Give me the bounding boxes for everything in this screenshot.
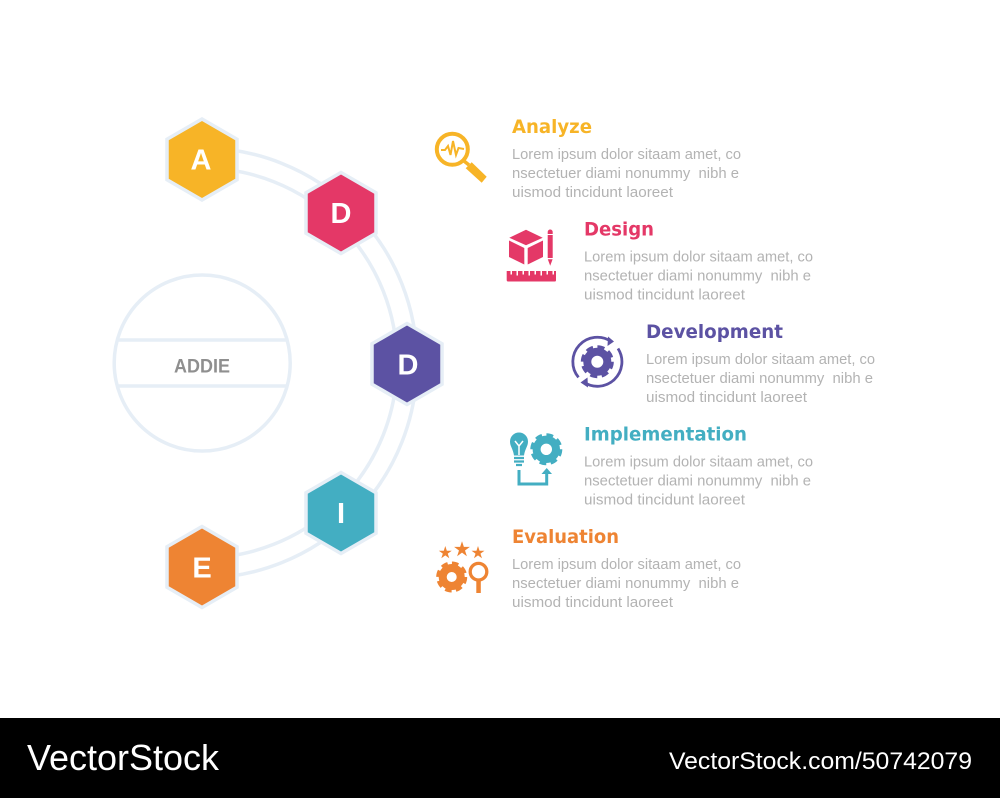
text block: Development description <box>646 352 875 406</box>
text block: Evaluation description <box>512 557 741 611</box>
text block: Implementation description: uismod tincidunt laoreet <box>584 492 745 508</box>
hexagon I <box>306 472 376 554</box>
central circle: ADDIE: ADDIE <box>174 356 230 378</box>
double arc connector <box>202 148 417 578</box>
hexagon A: A <box>191 144 212 176</box>
icon: gear with cycle arrows <box>573 336 622 388</box>
hexagon D (design) <box>306 172 376 254</box>
text block: Design description <box>584 250 813 304</box>
text block: Analyze description <box>512 147 741 201</box>
hexagon D (development) <box>372 324 442 404</box>
footer bar <box>0 718 1000 798</box>
heading: Design: Design <box>584 218 654 240</box>
central circle: ADDIE <box>114 275 290 451</box>
text block: Evaluation description: Lorem ipsum dolor sitaam amet, co <box>512 557 741 573</box>
hexagon D (design): D <box>331 198 351 230</box>
icon: box, pencil and ruler <box>507 230 556 282</box>
heading: Evaluation: Evaluation <box>512 526 619 548</box>
footer bar: VectorStock <box>27 737 220 778</box>
icon: magnifier with pulse <box>437 134 487 183</box>
heading: Development: Development <box>646 321 783 343</box>
text block: Evaluation description: uismod tincidunt laoreet <box>512 595 673 611</box>
text block: Design description: Lorem ipsum dolor sitaam amet, co <box>584 250 813 266</box>
hexagon E: E <box>192 552 212 584</box>
text block: Analyze description: Lorem ipsum dolor sitaam amet, co <box>512 147 741 163</box>
footer bar: VectorStock.com/50742079 <box>669 748 972 775</box>
hexagon E <box>167 526 237 608</box>
hexagon A <box>167 119 237 200</box>
text block: Design description: uismod tincidunt laoreet <box>584 288 745 304</box>
icon: stars, gear and magnifier <box>438 541 487 593</box>
text block: Analyze description: nsectetuer diami nonummy nibh e <box>512 166 739 182</box>
hexagon D (development): D <box>398 350 418 382</box>
heading: Implementation: Implementation <box>584 424 747 446</box>
hexagon I: I <box>337 498 345 530</box>
text block: Development description: Lorem ipsum dolor sitaam amet, co <box>646 352 875 368</box>
text block: Development description: uismod tincidunt laoreet <box>646 390 807 406</box>
text block: Implementation description: nsectetuer diami nonummy nibh e <box>584 474 811 490</box>
text block: Implementation description: Lorem ipsum dolor sitaam amet, co <box>584 454 813 470</box>
text block: Design description: nsectetuer diami nonummy nibh e <box>584 268 811 284</box>
icon: light bulb, gear and arrow <box>510 432 560 484</box>
text block: Development description: nsectetuer diami nonummy nibh e <box>646 371 873 387</box>
text block: Analyze description: uismod tincidunt laoreet <box>512 185 673 201</box>
text block: Implementation description <box>584 454 813 508</box>
heading: Analyze: Analyze <box>512 116 592 138</box>
text block: Evaluation description: nsectetuer diami nonummy nibh e <box>512 576 739 592</box>
